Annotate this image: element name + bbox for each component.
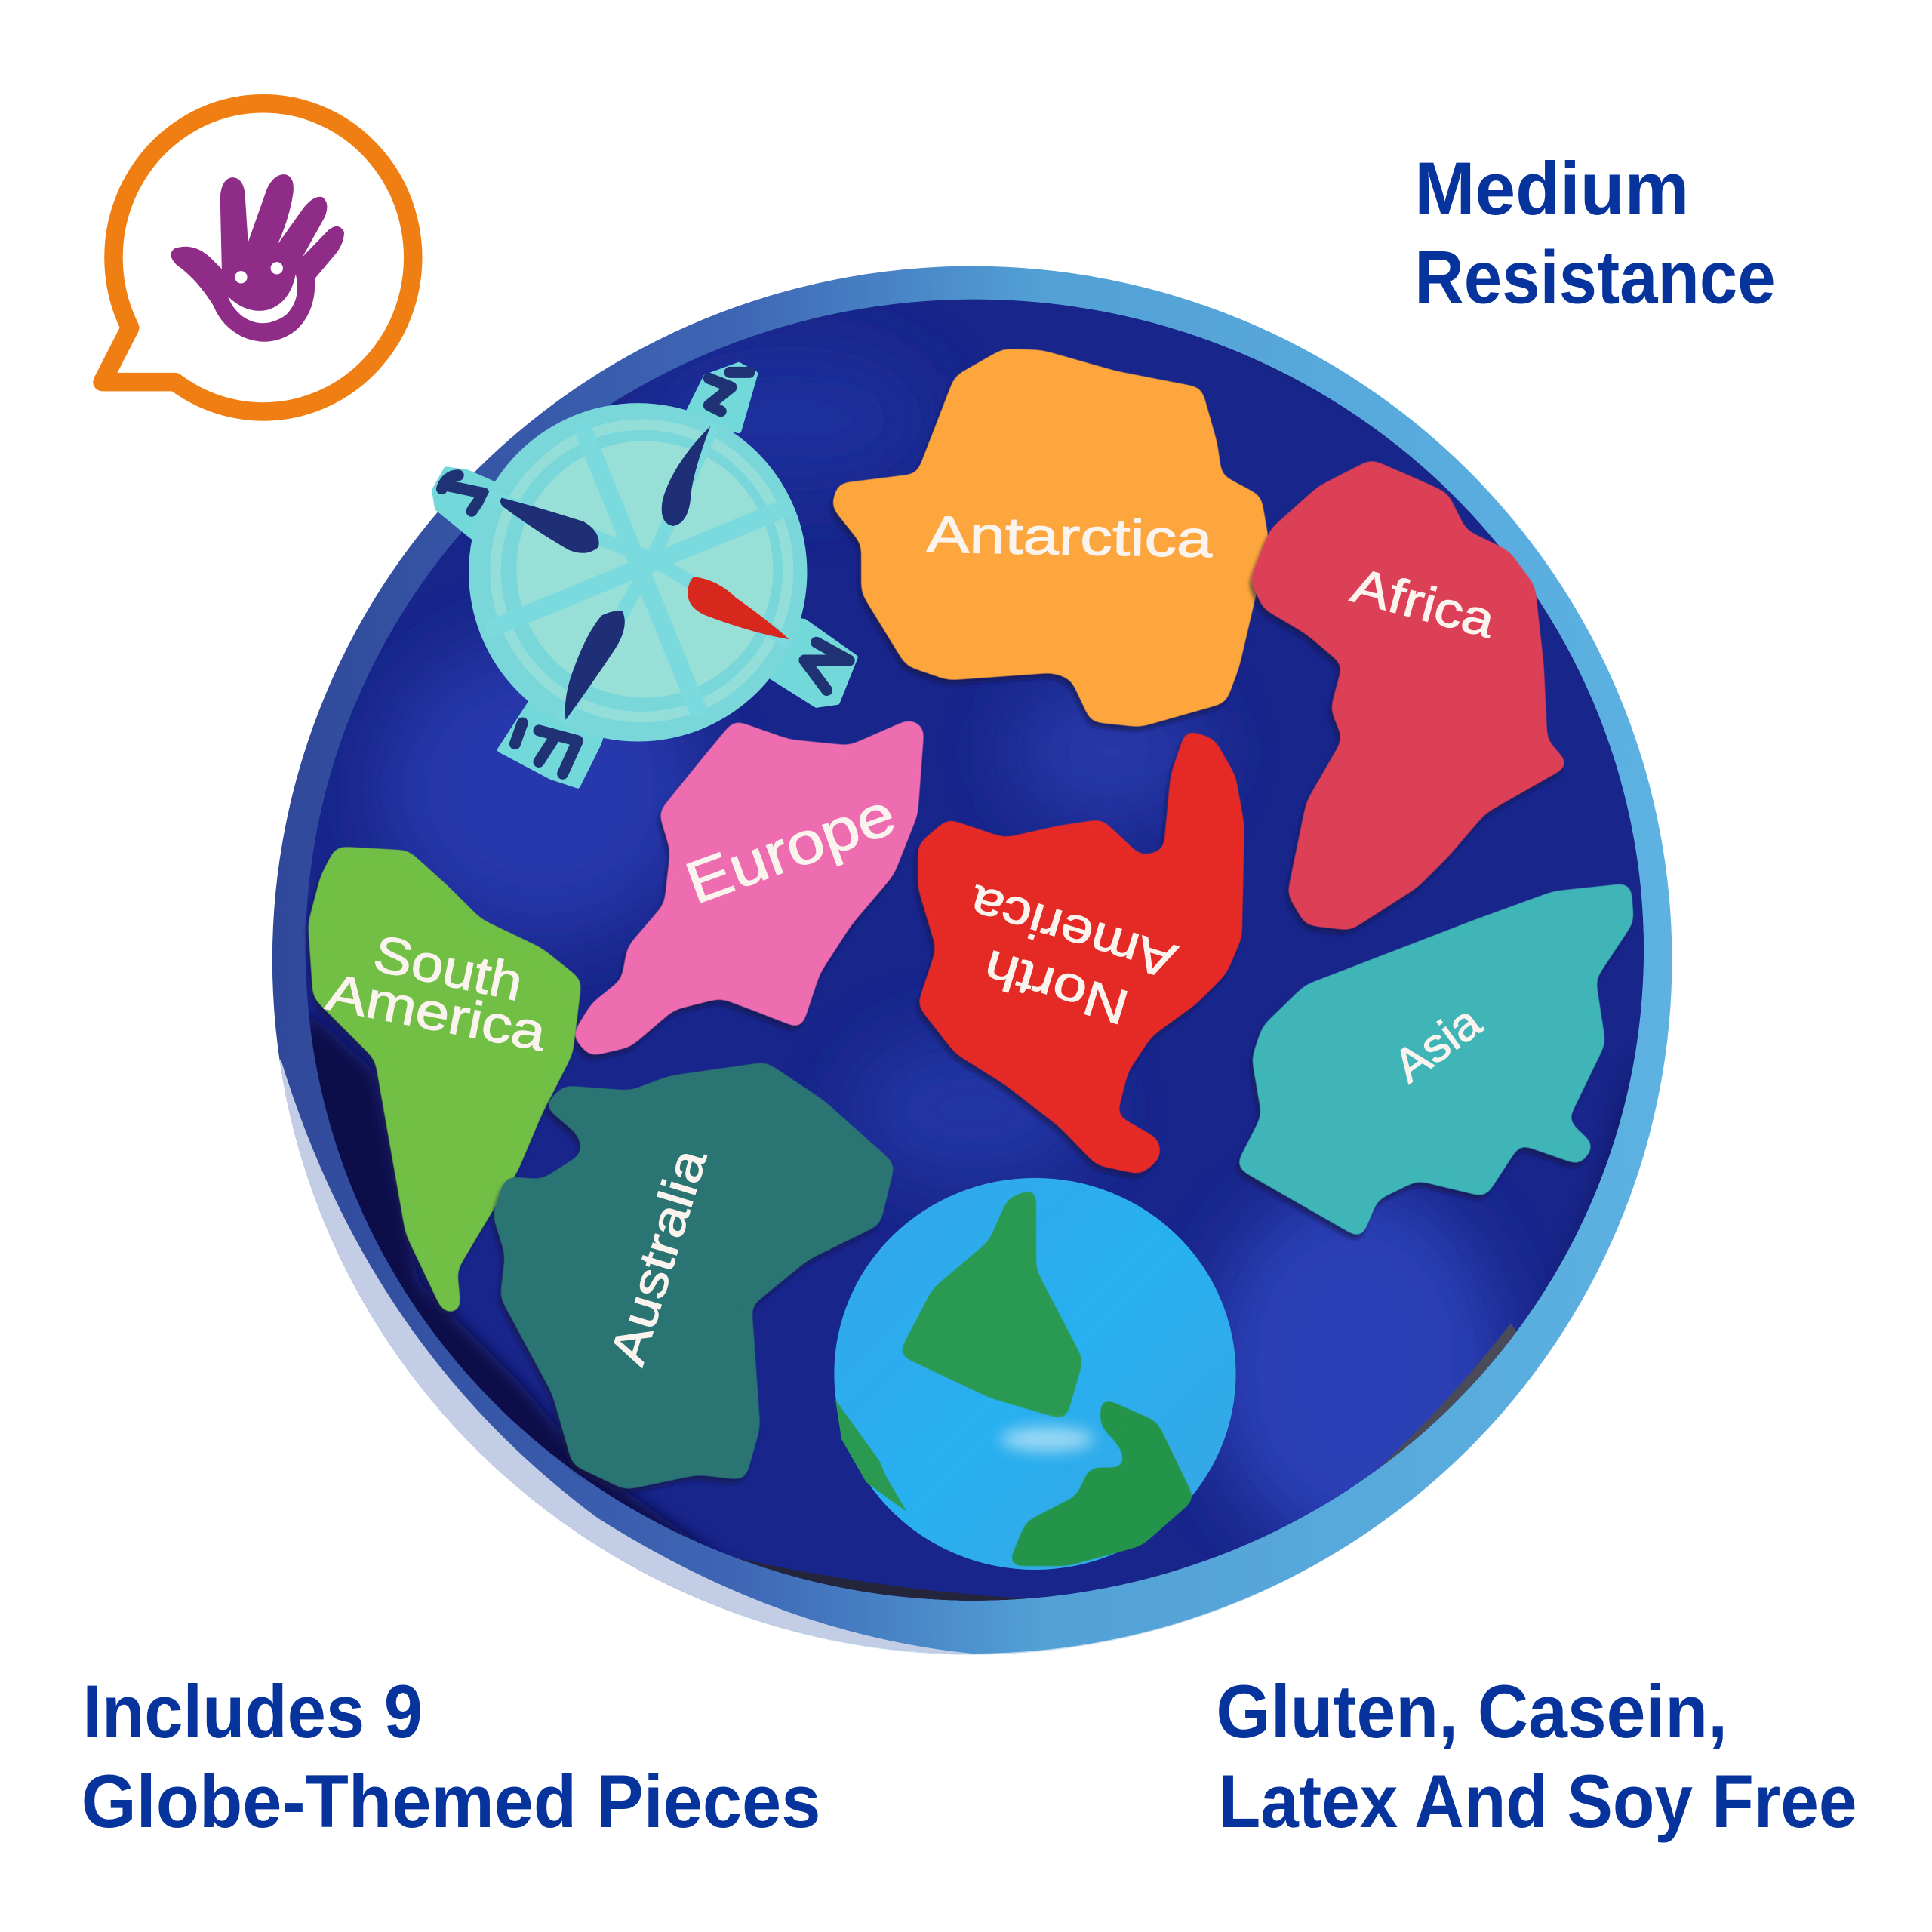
globe highlight [1001,1427,1094,1451]
heading: allergen free [1216,1670,1857,1844]
logo: speech bubble with hand [103,103,413,411]
piece: australia [498,1067,890,1484]
globe lower-right landmass [1013,1402,1190,1562]
piece: compass [435,365,855,786]
heading: includes 9 pieces [82,1670,820,1844]
africa label: Africa [1346,558,1501,648]
compass needles [662,426,710,526]
logo bubble outline [103,103,413,411]
tin pale lower-left crescent [271,1060,986,1665]
heading: includes 9 pieces: Globe-Themed Pieces [82,1760,820,1844]
putty surface [284,296,1675,1626]
compass tab letters [441,372,849,774]
globe central landmass [903,1192,1079,1416]
heading: allergen free: Latex And Soy Free [1219,1760,1857,1844]
piece: asia [1242,888,1629,1232]
south america label: America [321,963,552,1062]
south america label: South [369,924,528,1012]
north america label [946,875,1183,1044]
heading: medium resistance [1414,147,1776,320]
logo hand icon [171,174,344,342]
tin wall shadow [306,300,1644,1601]
compass spokes [497,427,784,714]
heading: medium resistance: Medium [1414,147,1689,231]
heading: allergen free: Gluten, Casein, [1216,1670,1727,1754]
australia label: Australia [599,1142,717,1371]
antarctica label: Antarctica [926,505,1214,568]
tin of putty [271,266,1675,1665]
asia label: Asia [1384,995,1491,1093]
foil crescent [1378,1324,1517,1469]
globe left landmass [835,1400,907,1512]
compass tabs [435,365,855,786]
compass channel ring [496,425,788,717]
heading: includes 9 pieces: Includes 9 [82,1670,423,1754]
tin rim [272,266,1672,1654]
heading: medium resistance: Resistance [1414,236,1776,320]
europe label: Europe [677,780,903,917]
compass disc [469,403,807,742]
piece: earth globe [834,1178,1236,1570]
compass inner sectors [516,441,773,697]
piece: antarctica [837,354,1264,722]
foil strip [740,1558,1028,1601]
piece: north america [923,736,1239,1169]
piece: africa [1256,465,1562,925]
piece: south america [313,851,577,1307]
north america label: America [963,875,1183,989]
piece: europe [578,724,919,1051]
tin pale lower edge [276,270,1669,1655]
north america label: North [977,940,1135,1035]
south america label [321,924,552,1062]
globe ocean [834,1178,1236,1570]
